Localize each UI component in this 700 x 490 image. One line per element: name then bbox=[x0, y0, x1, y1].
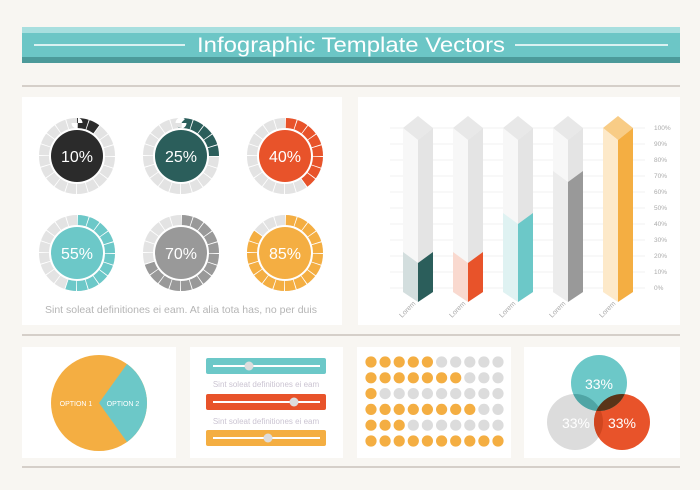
panel: venn diagram bbox=[524, 347, 680, 458]
slider teal bbox=[206, 358, 326, 374]
donut 40% bbox=[252, 123, 318, 189]
bar 1 20%: Lorem bbox=[398, 300, 418, 319]
panel: pie chart bbox=[22, 347, 176, 458]
slider red bbox=[206, 394, 326, 410]
bar 4 70%: Lorem bbox=[548, 300, 568, 319]
donut 55% bbox=[44, 220, 110, 286]
donut 10% bbox=[44, 123, 110, 189]
donut 70% bbox=[148, 220, 214, 286]
panel: donut charts bbox=[22, 97, 342, 325]
donut 55%: 55% bbox=[61, 246, 93, 263]
panel: sliders: Sint soleat definitiones ei eam bbox=[213, 380, 319, 389]
panel: pie chart: OPTION 2 bbox=[107, 401, 139, 408]
y axis labels: 30% bbox=[654, 237, 667, 244]
bar 5 100%: Lorem bbox=[598, 300, 618, 319]
donut 40%: 40% bbox=[269, 149, 301, 166]
y axis labels: 50% bbox=[654, 205, 667, 212]
bar 3 45%: Lorem bbox=[498, 300, 518, 319]
donut 70%: 70% bbox=[165, 246, 197, 263]
panel: sliders bbox=[190, 347, 343, 458]
panel: venn diagram: 33% bbox=[585, 376, 613, 392]
donut 85%: 85% bbox=[269, 246, 301, 263]
bar 2 20% bbox=[448, 116, 483, 319]
y axis labels: 90% bbox=[654, 141, 667, 148]
panel: venn diagram: 33% bbox=[608, 415, 636, 431]
title: Infographic Template Vectors bbox=[197, 34, 505, 57]
bar 4 70% bbox=[548, 116, 583, 319]
y axis labels: 40% bbox=[654, 221, 667, 228]
panel: dot matrix bbox=[357, 347, 511, 458]
y axis labels: 0% bbox=[654, 285, 664, 292]
y axis labels: 60% bbox=[654, 189, 667, 196]
donut 10%: 10% bbox=[61, 149, 93, 166]
header banner bbox=[22, 27, 680, 63]
y axis labels: 20% bbox=[654, 253, 667, 260]
donut 85% bbox=[252, 220, 318, 286]
bar 5 100% bbox=[598, 116, 633, 319]
y axis labels: 100% bbox=[654, 125, 671, 132]
panel: sliders: Sint soleat definitiones ei eam bbox=[213, 417, 319, 426]
donut 25%: 25% bbox=[165, 149, 197, 166]
caption: Sint soleat definitiones ei eam. At alia tota has, no per duis bbox=[45, 304, 317, 316]
panel: venn diagram: 33% bbox=[562, 415, 590, 431]
y axis labels: 70% bbox=[654, 173, 667, 180]
y axis labels bbox=[654, 125, 671, 292]
bar 1 20% bbox=[398, 116, 433, 319]
y axis labels: 80% bbox=[654, 157, 667, 164]
panel: 3D bar chart bbox=[358, 97, 680, 325]
slider orange bbox=[206, 430, 326, 446]
donut 25% bbox=[148, 123, 214, 189]
panel: pie chart: OPTION 1 bbox=[60, 401, 92, 408]
bar 3 45% bbox=[498, 116, 533, 319]
y axis labels: 10% bbox=[654, 269, 667, 276]
bar 2 20%: Lorem bbox=[448, 300, 468, 319]
